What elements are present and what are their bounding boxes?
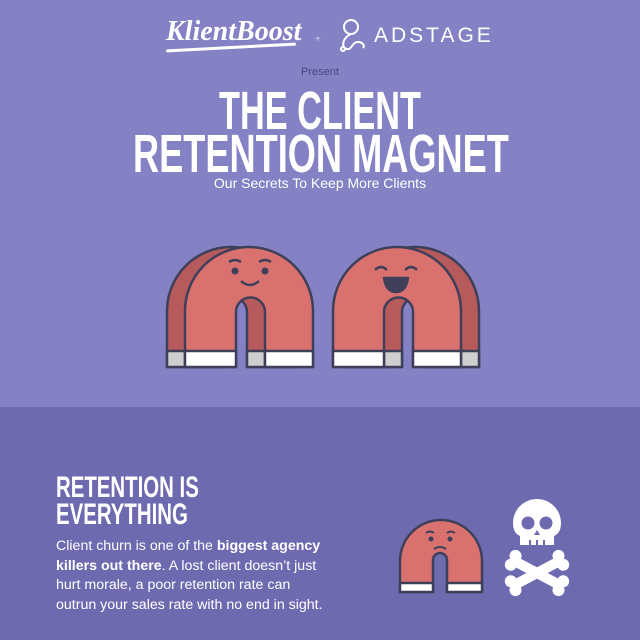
paragraph: outrun your sales rate with no end in sight.	[56, 596, 323, 612]
icon: skull and crossbones	[504, 499, 570, 596]
paragraph: hurt morale, a poor retention rate can	[56, 577, 290, 593]
logo: AdStage	[340, 19, 494, 52]
subtitle: Our Secrets To Keep More Clients	[214, 175, 426, 191]
illustration: two magnets	[166, 246, 480, 368]
right magnet	[333, 247, 479, 367]
title: THE CLIENT	[219, 81, 421, 141]
logo: AdStage: ADSTAGE	[374, 24, 494, 47]
icon: sad magnet	[398, 518, 484, 594]
title: RETENTION MAGNET	[133, 124, 509, 184]
heading: Retention is everything: EVERYTHING	[56, 498, 188, 531]
title	[133, 81, 509, 184]
left magnet	[167, 247, 313, 367]
paragraph	[56, 538, 323, 612]
paragraph: killers out there. A lost client doesn’t just	[56, 558, 316, 574]
text: Present: Present	[301, 66, 339, 78]
logo: KlientBoost: KlientBoost	[166, 16, 301, 47]
plus sign: +	[315, 34, 321, 45]
heading: Retention is everything	[56, 471, 199, 531]
heading: Retention is everything: RETENTION IS	[56, 471, 199, 504]
paragraph: Client churn is one of the biggest agency	[56, 538, 320, 554]
